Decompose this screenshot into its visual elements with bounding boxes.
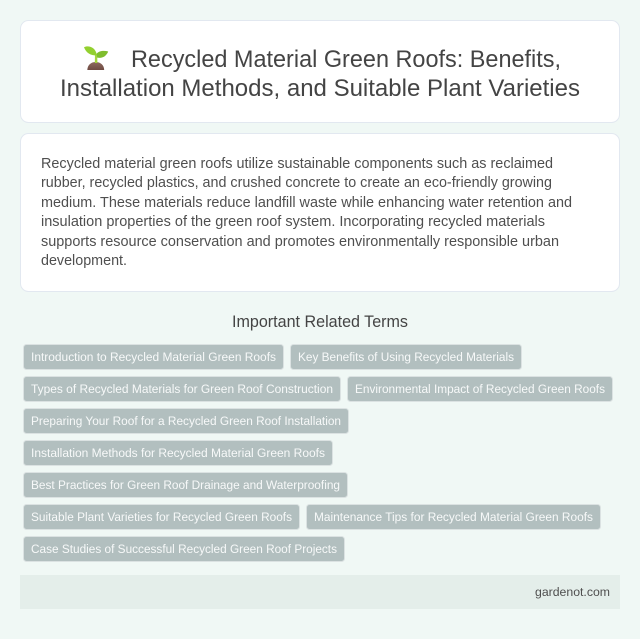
text block: description: Recycled material green roofs utilize sustainable components such as reclaimed xyxy=(41,156,553,172)
footer xyxy=(20,575,620,609)
tag: key benefits xyxy=(290,344,522,370)
text block: description: supports resource conservation and promotes environmentally responsible urban xyxy=(41,234,559,250)
tag: environmental impact: Environmental Impact of Recycled Green Roofs xyxy=(355,382,605,396)
tag: introduction: Introduction to Recycled Material Green Roofs xyxy=(31,350,276,364)
tag: case studies xyxy=(24,536,344,562)
text block: description: development. xyxy=(41,253,127,269)
icon: sprout xyxy=(84,46,108,70)
panel: related terms tags xyxy=(24,344,612,562)
footer: gardenot.com xyxy=(535,585,610,599)
tag: case studies: Case Studies of Successful Recycled Green Roof Projects xyxy=(31,542,337,556)
tag: key benefits: Key Benefits of Using Recycled Materials xyxy=(298,350,514,364)
tag: environmental impact xyxy=(348,376,612,402)
tag: introduction xyxy=(24,344,284,370)
heading: important related terms: Important Related Terms xyxy=(232,313,408,331)
tag: maintenance tips: Maintenance Tips for Recycled Material Green Roofs xyxy=(314,510,593,524)
tag: suitable plants: Suitable Plant Varieties for Recycled Green Roofs xyxy=(31,510,292,524)
panel: title card xyxy=(20,20,620,122)
title xyxy=(60,46,580,102)
tag: installation methods: Installation Methods for Recycled Material Green Roofs xyxy=(31,446,325,460)
tag: maintenance tips xyxy=(306,504,600,530)
tag: types of materials: Types of Recycled Materials for Green Roof Construction xyxy=(31,382,333,396)
tag: preparing your roof xyxy=(24,408,348,434)
text block: description xyxy=(41,156,572,269)
text block: description: medium. These materials reduce landfill waste while enhancing water retention and xyxy=(41,195,572,211)
title: Installation Methods, and Suitable Plant Varieties xyxy=(60,75,580,102)
text block: description: rubber, recycled plastics, and crushed concrete to create an eco-friendly growing xyxy=(41,175,552,191)
title: Recycled Material Green Roofs: Benefits, xyxy=(131,46,561,73)
tag: best practices: Best Practices for Green Roof Drainage and Waterproofing xyxy=(31,478,340,492)
panel: description card xyxy=(20,134,620,292)
tag: suitable plants xyxy=(24,504,300,530)
text block: description: insulation properties of the green roof system. Incorporating recycled materials xyxy=(41,214,545,230)
tag: installation methods xyxy=(24,440,332,466)
tag: types of materials xyxy=(24,376,340,402)
tag: preparing your roof: Preparing Your Roof for a Recycled Green Roof Installation xyxy=(31,414,341,428)
tag: best practices xyxy=(24,472,348,498)
